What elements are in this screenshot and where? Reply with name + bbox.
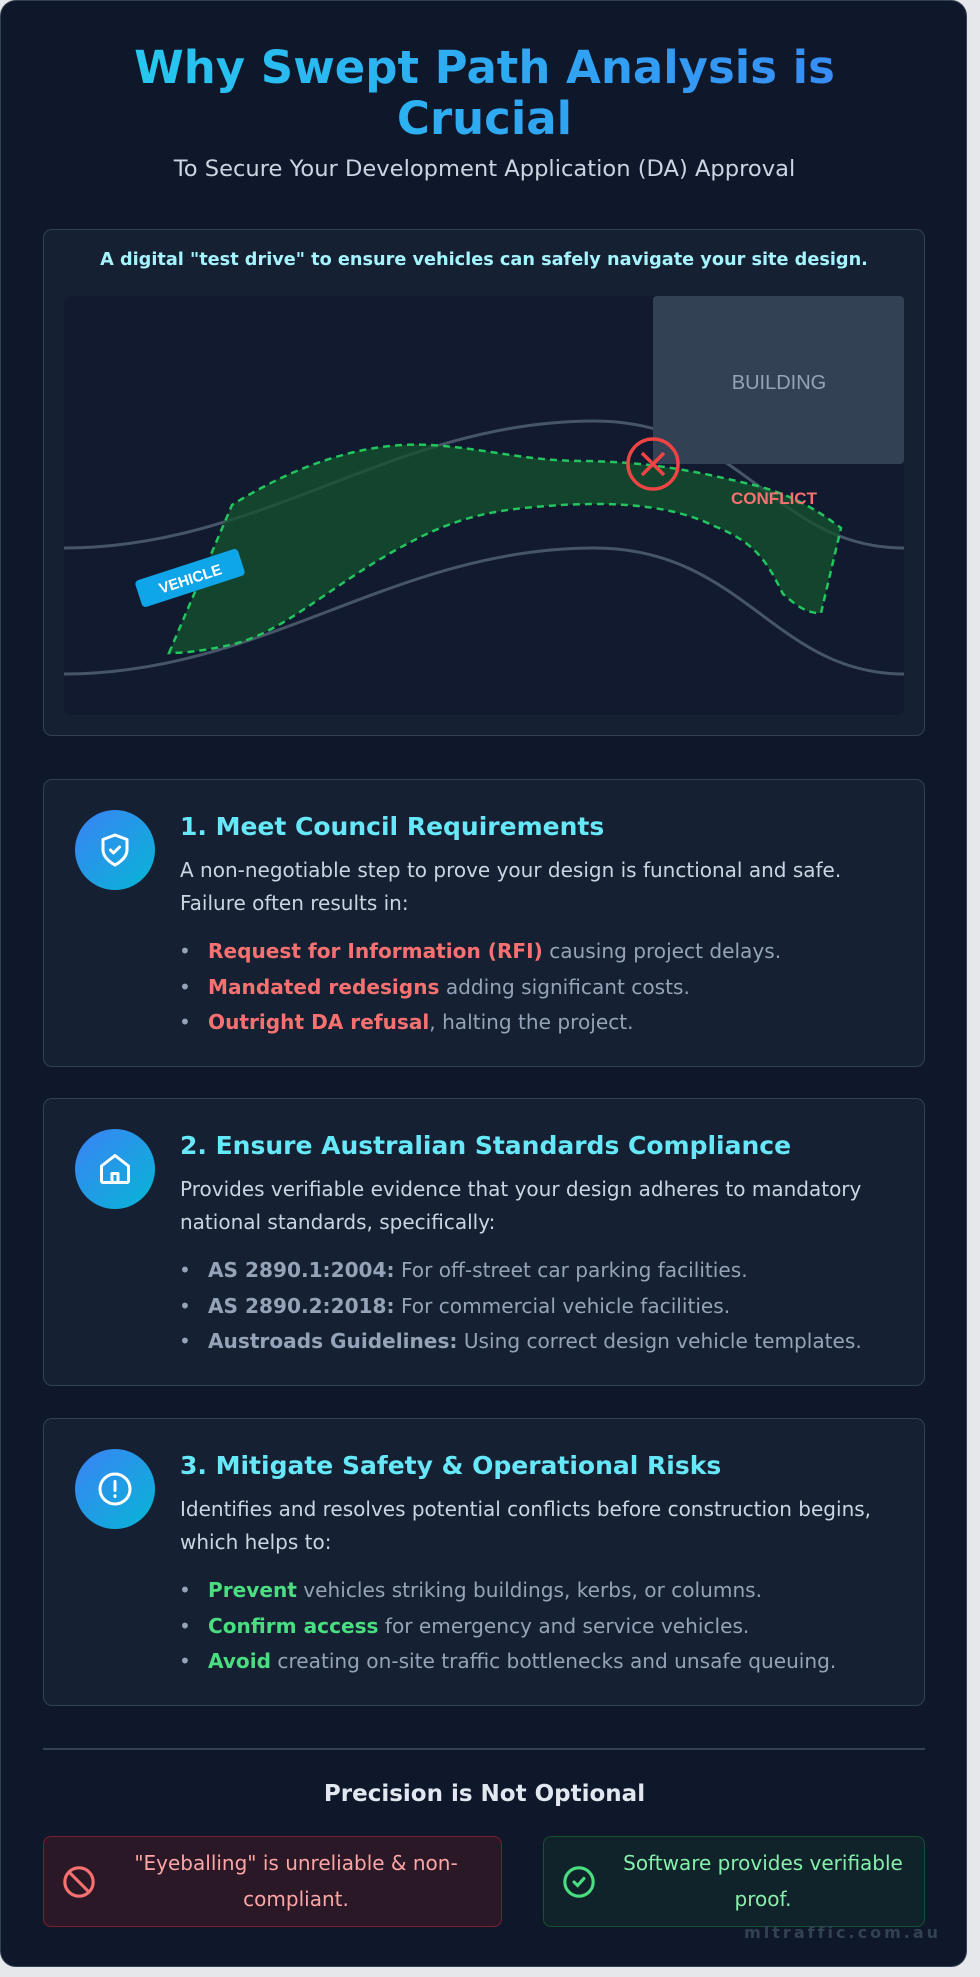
list: AS 2890.2:2018: For commercial vehicle facilities. — [208, 1294, 730, 1318]
card 2 — [43, 1098, 925, 1386]
text: Identifies and resolves potential conflicts before construction begins, which helps to: — [180, 1497, 871, 1554]
vehicle label: VEHICLE — [157, 561, 224, 598]
text: A non-negotiable step to prove your design is functional and safe. Failure often results in: — [180, 858, 841, 915]
heading: 2. Ensure Australian Standards Compliance — [180, 1131, 791, 1160]
callout: software — [543, 1836, 925, 1927]
icon: alert — [75, 1449, 155, 1529]
title — [1, 42, 968, 144]
list: Prevent vehicles striking buildings, kerbs, or columns. — [208, 1578, 762, 1602]
icon: shield — [75, 810, 155, 890]
heading: 3. Mitigate Safety & Operational Risks — [180, 1451, 721, 1480]
heading: 1. Meet Council Requirements — [180, 812, 604, 841]
icon: house — [75, 1129, 155, 1209]
conclusion heading: Precision is Not Optional — [324, 1781, 645, 1807]
subtitle: To Secure Your Development Application (DA) Approval — [174, 156, 795, 182]
diagram svg — [64, 296, 904, 676]
conflict marker: CONFLICT — [731, 489, 818, 508]
list: Mandated redesigns adding significant costs. — [208, 974, 690, 998]
list: Outright DA refusal, halting the project. — [208, 1010, 634, 1034]
callout: eyeballing — [43, 1836, 502, 1927]
list: Austroads Guidelines: Using correct design vehicle templates. — [208, 1329, 862, 1353]
card 1 — [43, 779, 925, 1067]
panel: diagram — [43, 229, 925, 736]
caption: A digital "test drive" to ensure vehicles can safely navigate your site design. — [100, 250, 868, 270]
list — [182, 1258, 862, 1353]
title: Crucial — [397, 92, 572, 145]
text: Software provides verifiable proof. — [623, 1851, 903, 1911]
icon: check — [563, 1866, 595, 1898]
text: Provides verifiable evidence that your design adheres to mandatory national standards, specifically: — [180, 1177, 861, 1234]
list: Avoid creating on-site traffic bottlenecks and unsafe queuing. — [208, 1649, 836, 1673]
building — [653, 296, 904, 464]
list — [182, 939, 781, 1034]
card 3 — [43, 1418, 925, 1706]
watermark: mltraffic.com.au — [744, 1923, 941, 1942]
icon: ban — [63, 1866, 95, 1898]
list: Request for Information (RFI) causing project delays. — [208, 939, 781, 963]
text: "Eyeballing" is unreliable & non-compliant. — [134, 1851, 458, 1911]
list: AS 2890.1:2004: For off-street car parking facilities. — [208, 1258, 748, 1282]
title: Why Swept Path Analysis is — [134, 41, 835, 94]
swept path — [169, 445, 841, 653]
list: Confirm access for emergency and service vehicles. — [208, 1614, 749, 1638]
building: BUILDING — [732, 372, 826, 394]
conflict marker — [628, 439, 818, 508]
vehicle label — [134, 548, 246, 608]
list — [182, 1578, 836, 1673]
